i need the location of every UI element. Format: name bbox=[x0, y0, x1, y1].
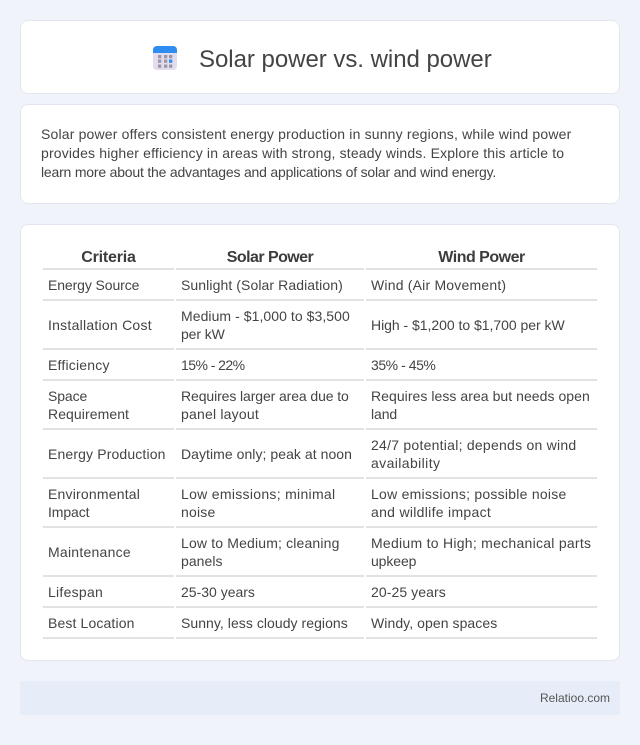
row: Efficiency: Efficiency bbox=[48, 357, 110, 373]
Solar: Installation Cost: per kW bbox=[181, 326, 225, 342]
Solar: Efficiency: 15% - 22% bbox=[181, 357, 245, 373]
row: Space Requirement: Requirement bbox=[48, 406, 129, 422]
icon: calendar bbox=[153, 46, 177, 70]
Wind: Space Requirement: Requires less area but needs open bbox=[371, 388, 590, 404]
Solar: Best Location: Sunny, less cloudy regions bbox=[181, 615, 348, 631]
Wind: Space Requirement bbox=[371, 388, 590, 422]
Wind: Environmental Impact bbox=[371, 486, 567, 520]
Solar: Maintenance: Low to Medium; cleaning bbox=[181, 535, 340, 551]
Wind: Maintenance bbox=[371, 535, 591, 569]
row: Space Requirement: Space bbox=[48, 388, 87, 404]
row: Lifespan: Lifespan bbox=[48, 584, 103, 600]
Wind: Best Location: Windy, open spaces bbox=[371, 615, 497, 631]
row: Energy Production: Energy Production bbox=[48, 446, 166, 462]
row: Environmental Impact: Environmental bbox=[48, 486, 140, 502]
panel: title card bbox=[20, 20, 620, 94]
Wind: Environmental Impact: and wildlife impact bbox=[371, 504, 491, 520]
row: Environmental Impact: Impact bbox=[48, 504, 89, 520]
row: Best Location: Best Location bbox=[48, 615, 135, 631]
intro text bbox=[41, 126, 572, 180]
Wind: Maintenance: Medium to High; mechanical parts bbox=[371, 535, 591, 551]
comparison table bbox=[43, 249, 597, 639]
row: Energy Source: Energy Source bbox=[48, 277, 139, 293]
row: Space Requirement bbox=[48, 388, 129, 422]
header: Solar Power: Solar Power bbox=[227, 249, 313, 266]
Wind: Energy Production bbox=[371, 437, 576, 471]
intro text: Solar power offers consistent energy production in sunny regions, while wind power bbox=[41, 126, 571, 142]
panel: comparison table bbox=[20, 224, 620, 661]
row: Installation Cost: Installation Cost bbox=[48, 317, 152, 333]
Wind: Installation Cost: High - $1,200 to $1,700 per kW bbox=[371, 317, 565, 333]
Wind: Space Requirement: land bbox=[371, 406, 397, 422]
Wind: Lifespan: 20-25 years bbox=[371, 584, 446, 600]
Solar: Energy Source: Sunlight (Solar Radiation) bbox=[181, 277, 343, 293]
Solar: Energy Production: Daytime only; peak at noon bbox=[181, 446, 352, 462]
Solar: Installation Cost bbox=[181, 308, 350, 342]
Wind: Efficiency: 35% - 45% bbox=[371, 357, 435, 373]
Wind: Maintenance: upkeep bbox=[371, 553, 416, 569]
row: Environmental Impact bbox=[48, 486, 140, 520]
Solar: Maintenance bbox=[181, 535, 340, 569]
intro text: learn more about the advantages and applications of solar and wind energy. bbox=[41, 164, 496, 180]
intro text: provides higher efficiency in areas with strong, steady winds. Explore this article to bbox=[41, 145, 564, 161]
Solar: Lifespan: 25-30 years bbox=[181, 584, 255, 600]
Wind: Energy Production: 24/7 potential; depends on wind bbox=[371, 437, 576, 453]
Wind: Energy Production: availability bbox=[371, 455, 440, 471]
Solar: Maintenance: panels bbox=[181, 553, 223, 569]
Solar: Environmental Impact: Low emissions; minimal bbox=[181, 486, 335, 502]
row: Maintenance: Maintenance bbox=[48, 544, 131, 560]
Solar: Environmental Impact: noise bbox=[181, 504, 215, 520]
Wind: Environmental Impact: Low emissions; possible noise bbox=[371, 486, 567, 502]
Solar: Environmental Impact bbox=[181, 486, 335, 520]
footer bar bbox=[20, 681, 620, 715]
footer credit: Relatioo.com bbox=[540, 691, 610, 705]
Solar: Space Requirement: Requires larger area due to bbox=[181, 388, 349, 404]
Solar: Space Requirement: panel layout bbox=[181, 406, 259, 422]
title: Solar power vs. wind power bbox=[199, 46, 492, 73]
Wind: Energy Source: Wind (Air Movement) bbox=[371, 277, 506, 293]
panel: introduction bbox=[20, 104, 620, 204]
header: Criteria: Criteria bbox=[81, 249, 136, 266]
Solar: Installation Cost: Medium - $1,000 to $3,500 bbox=[181, 308, 350, 324]
header: Wind Power: Wind Power bbox=[438, 249, 525, 266]
Solar: Space Requirement bbox=[181, 388, 349, 422]
